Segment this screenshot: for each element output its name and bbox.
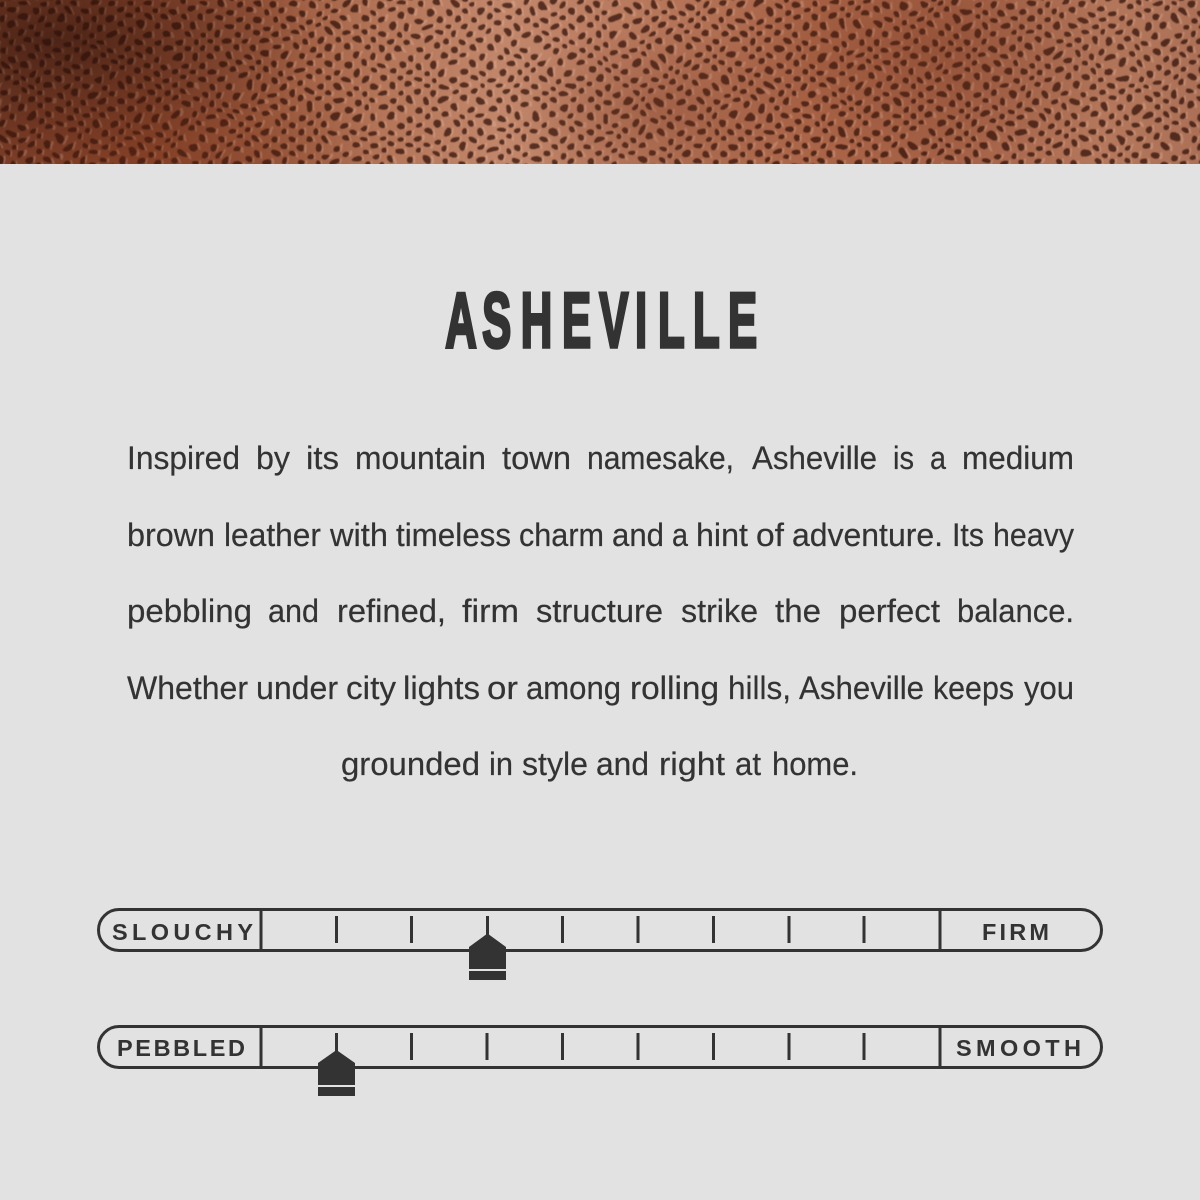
description text block: adventure. [792,517,943,553]
description text block: a [930,440,946,476]
description text block: leather [224,517,321,553]
description text block [127,440,1074,782]
title: ASHEVILLE [445,278,757,364]
description text block: town [502,440,571,476]
scale labels: SLOUCHY [112,919,253,945]
description text block: Asheville [799,670,924,706]
scale labels: FIRM [982,919,1049,945]
description text block: its [306,440,339,476]
description text block: rolling [630,670,719,706]
description text block: with [329,517,388,553]
description text block: among [526,670,621,706]
description text block: of [756,517,784,553]
description text block: and [612,517,664,553]
slider: pebbled to smooth [98,1026,1102,1096]
scale labels: PEBBLED [117,1035,245,1061]
description text block: lights [403,670,480,706]
description text block: grounded [341,746,480,782]
description text block: medium [962,440,1074,476]
description text block: Inspired [127,440,240,476]
marker [318,1050,355,1096]
description text block: timeless [396,517,511,553]
description text block: hint [696,517,748,553]
slider track [98,909,1102,951]
description text block: a [672,517,688,553]
description text block: mountain [355,440,486,476]
description text block: perfect [839,593,940,629]
description text block: firm [462,593,519,629]
description text block: and [268,593,319,629]
description text block: right [659,746,725,782]
description text block: Asheville [752,440,877,476]
description text block: strike [681,593,758,629]
description text block: you [1024,670,1074,706]
leather texture banner [0,0,1200,164]
description text block: heavy [993,517,1074,553]
scale labels [112,919,1049,945]
description text block: brown [127,517,215,553]
description text block: at [735,746,761,782]
description text block: and [596,746,649,782]
description text block: in [489,746,513,782]
marker [469,934,506,980]
slider track [98,1026,1102,1068]
description text block: keeps [933,670,1014,706]
description text block: charm [519,517,604,553]
slider: slouchy to firm [98,909,1102,980]
description text block: namesake, [587,440,734,476]
description text block: pebbling [127,593,252,629]
scale labels [117,1035,1081,1061]
description text block: under [256,670,338,706]
description text block: home. [772,746,858,782]
description text block: balance. [957,593,1074,629]
description text block: Its [952,517,984,553]
description text block: Whether [127,670,248,706]
description text block: is [893,440,914,476]
description text block: the [775,593,821,629]
description text block: refined, [337,593,446,629]
scale labels: SMOOTH [956,1035,1081,1061]
description text block: hills, [728,670,791,706]
description text block: city [346,670,396,706]
description text block: by [256,440,290,476]
description text block: style [522,746,588,782]
description text block: structure [536,593,663,629]
description text block: or [487,670,518,706]
